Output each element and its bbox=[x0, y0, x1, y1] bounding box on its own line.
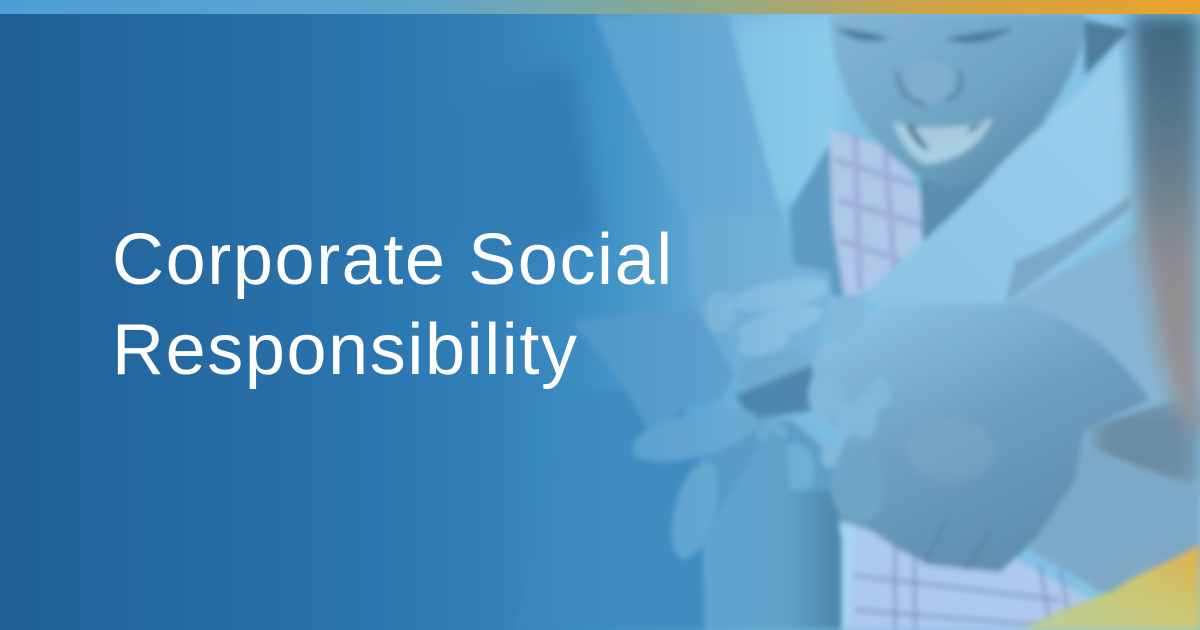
arm wrinkles bbox=[1005, 195, 1130, 303]
highlights on hand bbox=[905, 418, 995, 482]
title: Responsibility bbox=[112, 310, 579, 390]
arm: upper left bbox=[595, 14, 782, 225]
plaid lower dress bbox=[838, 510, 1092, 630]
icon: left child's blue shirt and shoulder bbox=[515, 390, 705, 630]
hand: top centre bbox=[688, 215, 830, 400]
yellow shirt bbox=[1021, 543, 1200, 630]
arm: upper right adult bbox=[862, 40, 1133, 305]
hand: lower fingers bbox=[627, 398, 840, 563]
title: Corporate Social bbox=[112, 220, 674, 300]
hand: upper left child bbox=[572, 310, 735, 432]
icon: dress top bbox=[829, 130, 925, 300]
arm: right wrist bbox=[1000, 230, 1170, 430]
foreground child head bbox=[1130, 14, 1200, 435]
nose bbox=[906, 60, 954, 104]
hand: large right bbox=[810, 303, 1150, 572]
title bbox=[112, 220, 674, 390]
neck bbox=[920, 120, 1050, 255]
mouth bbox=[893, 118, 993, 164]
fingers on right hand bbox=[808, 288, 891, 469]
eyes bbox=[835, 28, 1015, 43]
top gradient bar bbox=[0, 0, 1200, 14]
icon: child face bbox=[830, 14, 1086, 187]
dark shoulder bbox=[790, 143, 850, 300]
hand: bottom bbox=[706, 430, 842, 630]
hair behind ear bbox=[1085, 20, 1130, 75]
arm: lower right bbox=[1030, 445, 1200, 600]
